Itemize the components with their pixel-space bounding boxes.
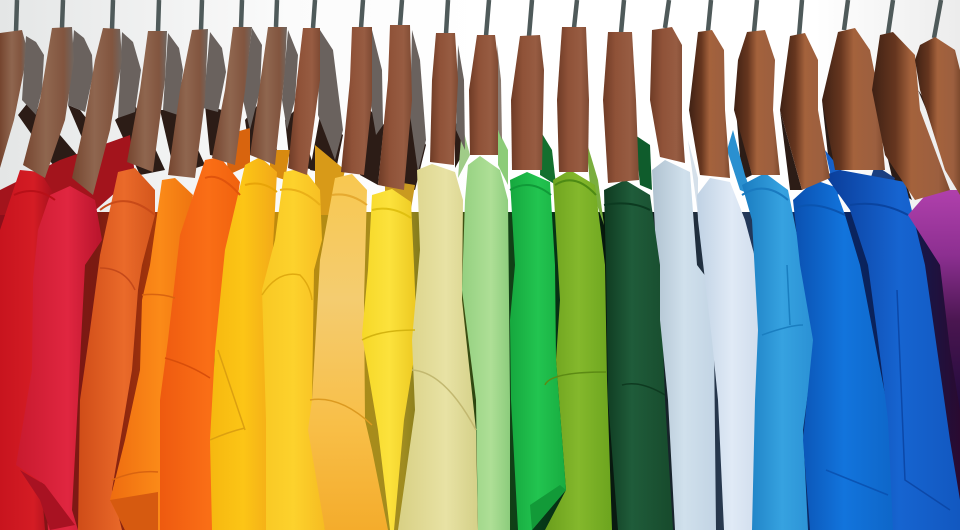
shirt: sky blue	[742, 173, 815, 530]
hanger 13	[511, 35, 544, 170]
shirt: blue	[793, 180, 895, 530]
hanger 12	[469, 35, 498, 155]
shirt: lighter blue	[697, 178, 760, 530]
hanger 5	[168, 29, 208, 178]
hanger 9	[341, 27, 372, 175]
shirt: purple	[908, 190, 960, 410]
ribbed collars	[14, 177, 908, 218]
shirt: pale khaki	[398, 164, 478, 530]
hanger 8	[288, 28, 320, 175]
wooden hanger faces	[0, 25, 960, 200]
hanger 4	[127, 31, 167, 172]
shirt: yellow	[262, 168, 325, 530]
hanger 19	[780, 33, 830, 190]
shirt: light amber	[308, 174, 388, 530]
hanger 15	[603, 32, 639, 183]
shirt: red	[0, 170, 56, 530]
hanger 11	[430, 33, 458, 165]
hanger arms	[22, 28, 502, 172]
hanger 18	[734, 30, 780, 175]
crimson sleeve inner	[20, 470, 75, 530]
shirt: bright green	[510, 172, 566, 530]
shirt: crimson	[16, 186, 102, 530]
hanger 22	[915, 37, 960, 195]
shirts hanging behind hangers	[0, 125, 895, 225]
shirt: orange	[110, 178, 193, 530]
shirt: golden yellow	[210, 157, 277, 530]
hanger 1	[0, 30, 26, 168]
hanger struts and shadowed backs	[18, 90, 960, 200]
sleeve hems	[110, 492, 158, 530]
hanger 10	[378, 25, 412, 190]
shirt: royal blue	[825, 170, 960, 530]
shirt: dark green	[604, 180, 673, 530]
seams	[100, 265, 950, 510]
hanger 3	[72, 28, 122, 195]
shirt: orange-red	[160, 157, 240, 530]
hanger 14	[557, 27, 589, 172]
hanger 21	[872, 32, 950, 200]
hanger 7	[250, 27, 287, 165]
hanger 20	[822, 28, 885, 170]
shirt: dark orange	[78, 168, 155, 530]
green sleeve inner	[530, 485, 566, 530]
hanger 16	[650, 27, 685, 163]
shirts	[0, 156, 960, 530]
shirt: pale blue grey	[652, 160, 716, 530]
shirt: light green	[462, 156, 510, 530]
hanger 2	[23, 27, 74, 178]
hanger 6	[212, 27, 252, 165]
dark back layer behind shirts	[0, 212, 960, 530]
hanger 17	[689, 30, 730, 178]
shirt: bright yellow	[362, 189, 417, 530]
metal hooks	[16, 0, 941, 38]
shirt: lime	[545, 170, 612, 530]
